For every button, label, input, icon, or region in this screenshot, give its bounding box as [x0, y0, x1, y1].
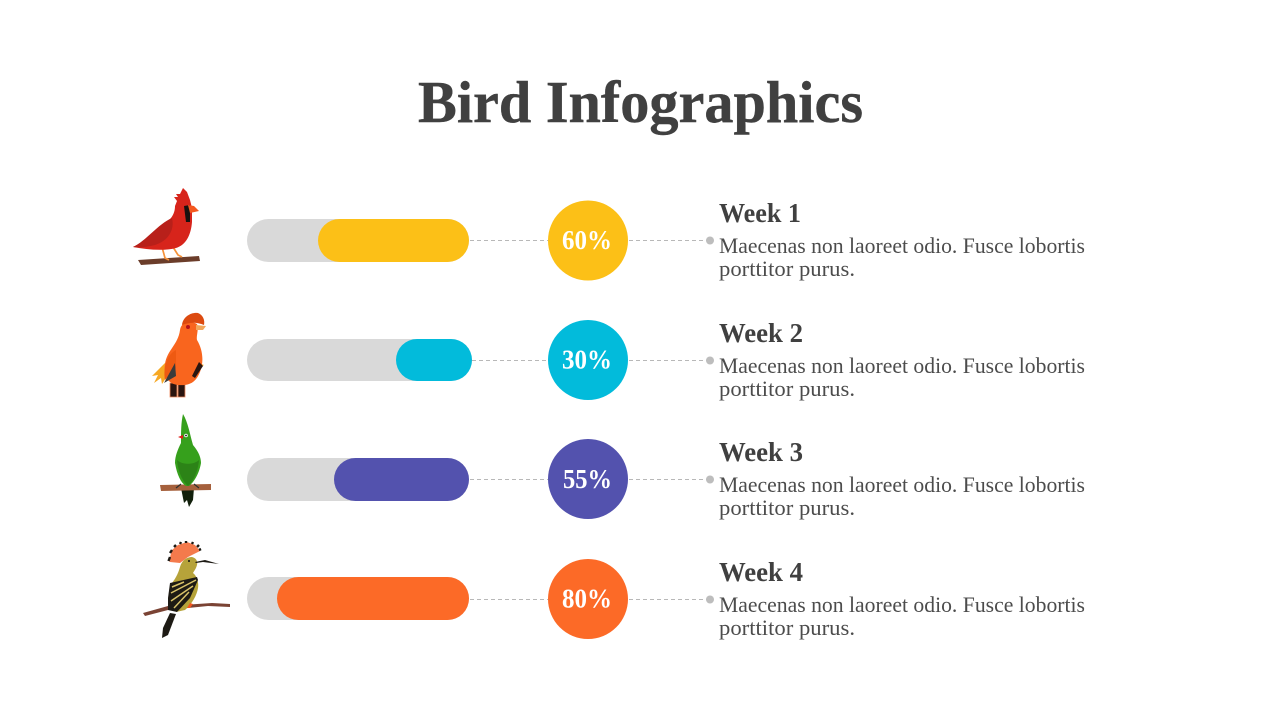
icon: orange cock-of-the-rock: [152, 313, 206, 397]
progress bar: 60%: [247, 219, 469, 262]
icon: hoopoe: [143, 541, 230, 638]
progress bar: 30%: [247, 339, 472, 381]
percentage badge: 80%: [548, 559, 628, 639]
icon: red cardinal: [133, 188, 200, 265]
text block: week 4: Maecenas non laoreet odio. Fusce lobortis: [719, 592, 1085, 617]
icon: green turaco: [160, 414, 211, 507]
text block: week 1: Week 1: [719, 198, 801, 228]
progress bar: 55%: [247, 458, 469, 501]
text block: week 2: porttitor purus.: [719, 376, 855, 401]
text block: week 2: Week 2: [719, 318, 803, 348]
text block: week 1: [719, 198, 1085, 281]
panel: week 4 row: [143, 541, 1085, 640]
text block: week 2: [719, 318, 1085, 401]
progress bar: 80%: [247, 577, 469, 620]
text block: week 3: Week 3: [719, 437, 803, 467]
text block: week 4: Week 4: [719, 557, 803, 587]
text block: week 1: porttitor purus.: [719, 256, 855, 281]
percentage badge: 60%: 60%: [562, 225, 612, 255]
connector: [470, 236, 714, 244]
percentage badge: 55%: [548, 439, 628, 519]
title: Bird Infographics: [418, 69, 863, 135]
percentage badge: 30%: 30%: [562, 344, 612, 374]
panel: week 3 row: [160, 414, 1085, 520]
text block: week 3: porttitor purus.: [719, 495, 855, 520]
text block: week 3: [719, 437, 1085, 520]
connector: [472, 356, 714, 364]
connector: [470, 476, 714, 484]
percentage badge: 60%: [548, 200, 628, 280]
percentage badge: 55%: 55%: [563, 464, 612, 494]
panel: week 2 row: [152, 313, 1085, 401]
percentage badge: 80%: 80%: [562, 584, 612, 614]
connector: [470, 596, 714, 604]
text block: week 4: [719, 557, 1085, 640]
text block: week 4: porttitor purus.: [719, 615, 855, 640]
text block: week 1: Maecenas non laoreet odio. Fusce lobortis: [719, 233, 1085, 258]
text block: week 3: Maecenas non laoreet odio. Fusce lobortis: [719, 472, 1085, 497]
panel: week 1 row: [133, 188, 1085, 281]
percentage badge: 30%: [548, 320, 628, 400]
text block: week 2: Maecenas non laoreet odio. Fusce lobortis: [719, 353, 1085, 378]
